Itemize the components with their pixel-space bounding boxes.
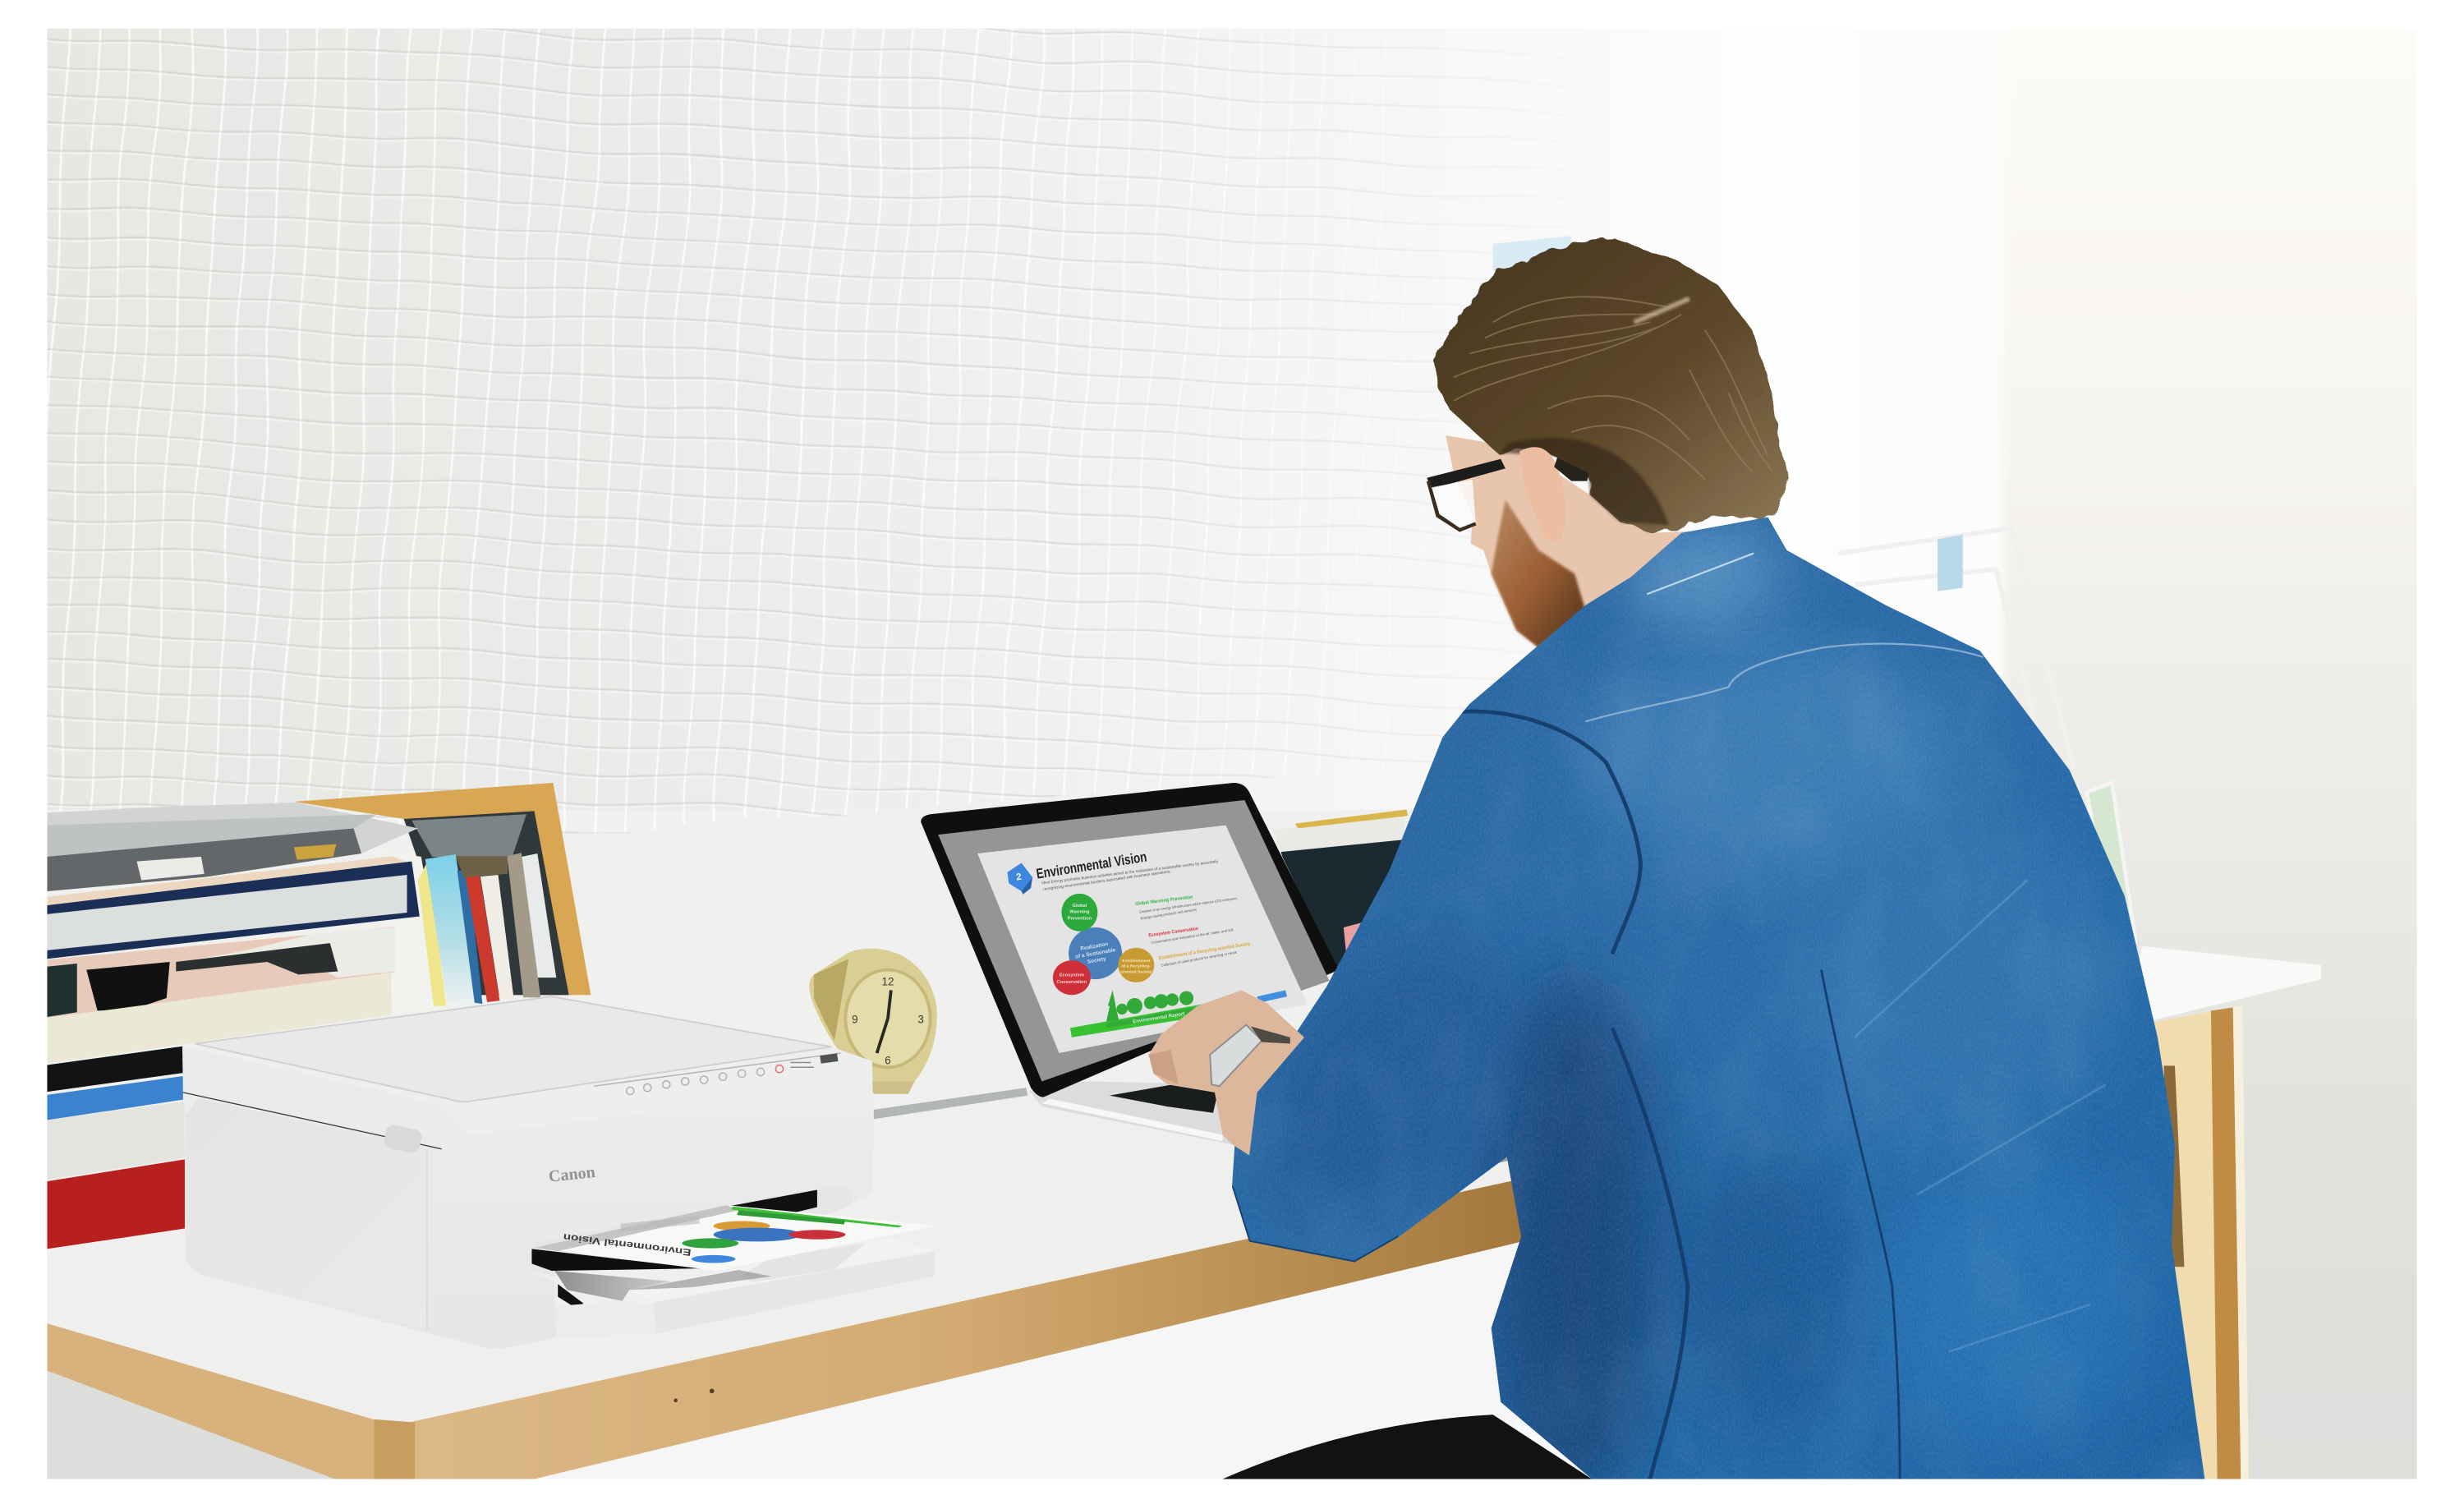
slide green circle: Warming: [1069, 910, 1090, 915]
printer logo: Canon: [548, 1163, 596, 1186]
glass strip on desk: [874, 1088, 1027, 1119]
hair: [1433, 239, 1790, 533]
desk: [47, 1093, 1521, 1479]
tray top surface: [628, 1238, 935, 1302]
slide blue circle: [1069, 927, 1122, 979]
picture frame on far table: [2087, 783, 2135, 941]
slide red circle: Conservation: [1057, 980, 1087, 985]
picture book: [47, 927, 394, 1018]
white book: [47, 1100, 197, 1180]
plastic bag with magazines: [47, 803, 418, 891]
slide text blocks: Energy-saving products and services: [1140, 908, 1198, 920]
slide green circle: [1061, 894, 1097, 932]
inner tray: [554, 1271, 701, 1301]
slide green circle: Global: [1073, 904, 1087, 909]
printed page: [535, 1205, 936, 1271]
wire mesh panel on wall: [48, 28, 1476, 833]
denim shirt: [1216, 511, 2216, 1509]
slide text blocks: Establishment of a Recycling-oriented Society: [1158, 941, 1251, 961]
alarm clock: [809, 949, 937, 1094]
printer: [182, 996, 936, 1348]
printer output tray: [554, 1238, 935, 1337]
blue note behind head: [1493, 236, 1571, 270]
printer QR code: [820, 1053, 838, 1064]
slide green circle: Prevention: [1068, 916, 1092, 921]
slide gold circle: of a Recycling-: [1122, 964, 1151, 969]
wall rack behind man: [1838, 527, 2004, 603]
slide gold circle: Establishment: [1122, 959, 1151, 964]
floor left: [47, 1368, 335, 1479]
desk leg: [374, 1419, 415, 1479]
slide text blocks: [1135, 895, 1251, 968]
slide text blocks: Ecosystem Conservation: [1148, 927, 1199, 938]
laptop screen gray: [938, 800, 1330, 1081]
hand and forearm: [1149, 990, 1304, 1155]
printer side panel: [186, 1098, 427, 1330]
far table on right: [2087, 783, 2321, 1479]
slide blue button: [1257, 990, 1287, 1003]
slide blue circle: Society: [1087, 956, 1107, 965]
far table top: [2129, 946, 2321, 1020]
desk edge wood left: [47, 1323, 394, 1479]
printer scanner lid: [195, 996, 831, 1102]
picture frame leaning on wall: [294, 783, 591, 995]
alarm clock: 9: [852, 1014, 858, 1026]
shirt seams: [1232, 554, 2106, 1479]
slide: [977, 826, 1308, 1053]
beard: [1492, 500, 1588, 647]
blue book: [47, 1076, 183, 1120]
desk edge wood right: [394, 1179, 1521, 1479]
printer latch: [383, 1124, 423, 1154]
laptop: [921, 783, 1339, 1144]
slide intro text: recognizing environmental burdens associated with business operations.: [1043, 869, 1171, 892]
neck and face skin: [1446, 435, 1689, 647]
stack of books: [47, 803, 420, 1249]
printer top deck: [184, 1044, 872, 1135]
alarm clock: 3: [917, 1014, 924, 1026]
shirt shading: [1485, 974, 1657, 1509]
desk surface: [47, 1093, 1521, 1425]
black book: [47, 1047, 183, 1092]
paper support: [740, 1244, 866, 1281]
slide text blocks: Creation of an energy infrastructure which reduces CO2 emissions: [1139, 896, 1238, 914]
glasses: [1427, 458, 1588, 530]
slide cube icon: 2: [1015, 872, 1023, 883]
slide text blocks: Global Warming Prevention: [1135, 895, 1193, 907]
upright books: [375, 850, 540, 1009]
printer front body: [184, 1006, 873, 1348]
slide gold circle: oriented Society: [1120, 969, 1152, 974]
red book: [47, 1159, 185, 1249]
laptop bezel: [921, 783, 1339, 1097]
far table wood leg: [2154, 1006, 2249, 1479]
watch: [1210, 1025, 1262, 1086]
chair back: [1223, 1415, 1592, 1479]
slide green bar and trees: Environmental Report: [1133, 1011, 1185, 1025]
navy book: [47, 862, 420, 959]
man: [1149, 239, 2216, 1509]
printer output slot: [531, 1185, 853, 1313]
slide red circle: [1053, 960, 1091, 995]
slide blue circle: Realization: [1080, 941, 1109, 952]
denim texture: [1225, 511, 2216, 1485]
printer hinge panel: [182, 1047, 442, 1148]
tray front bar: [654, 1252, 935, 1334]
slide green bar and trees: [1070, 990, 1218, 1037]
wood knots: [673, 1389, 715, 1402]
slide text blocks: Collection of used products for recycling or reuse: [1161, 950, 1238, 968]
slide title: Environmental Vision: [1035, 849, 1148, 882]
tan book: [47, 856, 411, 907]
printed page: Environmental Vision: [563, 1231, 692, 1257]
slide cube icon: [1007, 863, 1032, 895]
printer front crease: [426, 1149, 428, 1330]
cream book: [47, 973, 391, 1064]
floor under desk: [535, 1242, 1516, 1479]
ear: [1519, 447, 1565, 541]
slide gold circle: [1118, 948, 1154, 982]
keyboard: [1110, 1083, 1218, 1113]
alarm clock: 12: [882, 976, 894, 988]
laptop base: [1029, 1081, 1241, 1144]
slide red circle: Ecosystem: [1060, 973, 1084, 978]
slide text blocks: Conservation and restoration of the air, water, and soil: [1151, 927, 1234, 945]
printer control panel: [594, 1053, 841, 1095]
back printer behind laptop: [1273, 809, 1408, 967]
slide blue circle: of a Sustainable: [1075, 947, 1116, 960]
slide intro text: Ideal Energy promotes business activities aimed at the realization of a sustainable society by accurately: [1041, 859, 1219, 886]
alarm clock: 6: [885, 1054, 891, 1066]
